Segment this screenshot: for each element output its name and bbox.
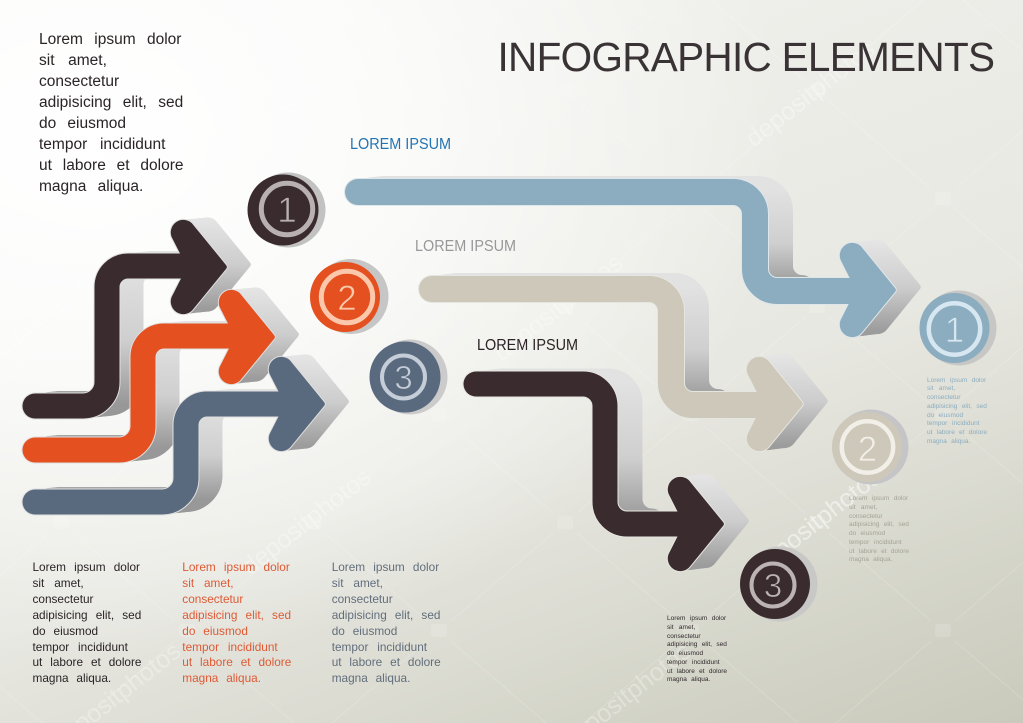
text block: intro: Lorem ipsum dolor — [39, 31, 181, 48]
arrow: right beige — [432, 286, 825, 448]
text block: right dark: Lorem ipsum dolor — [667, 615, 726, 622]
text block: right beige: adipisicing elit, sed — [849, 521, 909, 528]
text block: right blue — [927, 376, 987, 445]
text block: right dark: adipisicing elit, sed — [667, 641, 727, 648]
text block: intro — [39, 31, 184, 195]
text block: right blue: do eiusmod — [927, 412, 963, 418]
text block: right dark — [667, 615, 727, 683]
text block: slate column: ut labore et dolore — [332, 655, 441, 669]
text block: orange column: magna aliqua. — [182, 671, 261, 685]
text block: orange column: do eiusmod — [182, 624, 248, 638]
text block: right beige: Lorem ipsum dolor — [849, 495, 908, 502]
text block: intro: magna aliqua. — [39, 178, 143, 195]
arrow: right dark — [476, 381, 746, 568]
text block: slate column: magna aliqua. — [332, 671, 410, 685]
text block: orange column: ut labore et dolore — [182, 655, 291, 669]
arrow: left orange — [35, 290, 296, 450]
text block: slate column — [332, 560, 441, 685]
badge: right 1 — [920, 290, 996, 366]
text block: right dark: consectetur — [667, 632, 701, 640]
text block: right beige: tempor incididunt — [849, 539, 902, 546]
label: blue lorem ipsum: LOREM IPSUM — [350, 136, 451, 153]
badge: right 3 — [740, 546, 818, 622]
text block: slate column: do eiusmod — [332, 624, 397, 638]
text block: intro: ut labore et dolore — [39, 157, 184, 174]
text block: right blue: ut labore et dolore — [927, 429, 987, 436]
arrow: left dark — [35, 220, 248, 406]
badge: left 3: 3 — [394, 359, 413, 396]
background watermark: depositphotos — [236, 35, 376, 153]
text block: right beige: magna aliqua. — [849, 556, 892, 563]
text block: dark column: adipisicing elit, sed — [32, 608, 141, 622]
text block: intro: consectetur — [39, 73, 119, 90]
badge: left 1: 1 — [277, 191, 297, 230]
arrow: right blue — [358, 189, 918, 334]
text block: dark column: do eiusmod — [32, 624, 98, 638]
text block: dark column — [32, 560, 142, 685]
background watermark: depositphotos — [236, 463, 376, 581]
arrow: left slate — [35, 357, 346, 502]
badge: right 1: 1 — [945, 311, 964, 350]
badge: left 2: 2 — [337, 279, 357, 318]
text block: dark column: ut labore et dolore — [32, 655, 142, 669]
text block: slate column: tempor incididunt — [332, 640, 427, 654]
text block: right dark: do eiusmod — [667, 650, 703, 657]
text block: slate column: Lorem ipsum dolor — [332, 560, 439, 574]
label: dark lorem ipsum: LOREM IPSUM — [477, 337, 578, 354]
text block: right dark: tempor incididunt — [667, 659, 720, 666]
text block: intro: sit amet, — [39, 52, 107, 69]
background watermark: depositphotos — [488, 249, 628, 367]
text block: orange column: tempor incididunt — [182, 640, 278, 654]
text block: intro: tempor incididunt — [39, 136, 165, 153]
text block: right blue: Lorem ipsum dolor — [927, 376, 986, 384]
text block: slate column: consectetur — [332, 592, 393, 606]
text block: right dark: magna aliqua. — [667, 676, 710, 683]
text block: right beige — [849, 495, 909, 563]
badge: left 2 — [310, 259, 388, 334]
text block: dark column: Lorem ipsum dolor — [32, 560, 140, 574]
badge: right 3: 3 — [764, 567, 782, 604]
text block: intro: do eiusmod — [39, 115, 126, 132]
background watermark: depositphotos — [746, 463, 886, 581]
text block: slate column: sit amet, — [332, 576, 383, 590]
text block: right blue: sit amet, — [927, 385, 955, 392]
text block: orange column — [182, 560, 291, 685]
text block: orange column: adipisicing elit, sed — [182, 608, 291, 622]
text block: right blue: tempor incididunt — [927, 420, 980, 427]
text block: right beige: sit amet, — [849, 504, 877, 511]
badge: left 1 — [248, 172, 326, 248]
text block: orange column: sit amet, — [182, 576, 234, 590]
background watermark: depositphotos — [740, 35, 880, 153]
text block: right dark: sit amet, — [667, 624, 695, 631]
title: INFOGRAPHIC ELEMENTS — [498, 34, 994, 80]
text block: dark column: magna aliqua. — [32, 671, 111, 685]
badge: right 2 — [832, 410, 908, 484]
text block: dark column: tempor incididunt — [32, 640, 128, 654]
text block: orange column: consectetur — [182, 592, 243, 606]
badge: left 3 — [370, 340, 448, 414]
text block: right blue: magna aliqua. — [927, 438, 970, 445]
label: grey lorem ipsum: LOREM IPSUM — [415, 238, 516, 255]
text block: dark column: consectetur — [32, 592, 93, 606]
text block: intro: adipisicing elit, sed — [39, 94, 183, 111]
badge: right 2: 2 — [858, 430, 877, 469]
text block: dark column: sit amet, — [32, 576, 84, 590]
text block: right beige: consectetur — [849, 512, 883, 520]
text block: right beige: do eiusmod — [849, 530, 885, 537]
text block: slate column: adipisicing elit, sed — [332, 608, 440, 622]
text block: right dark: ut labore et dolore — [667, 668, 727, 674]
text block: right beige: ut labore et dolore — [849, 548, 909, 554]
text block: right blue: consectetur — [927, 394, 961, 401]
text block: orange column: Lorem ipsum dolor — [182, 560, 290, 574]
text block: right blue: adipisicing elit, sed — [927, 403, 987, 410]
